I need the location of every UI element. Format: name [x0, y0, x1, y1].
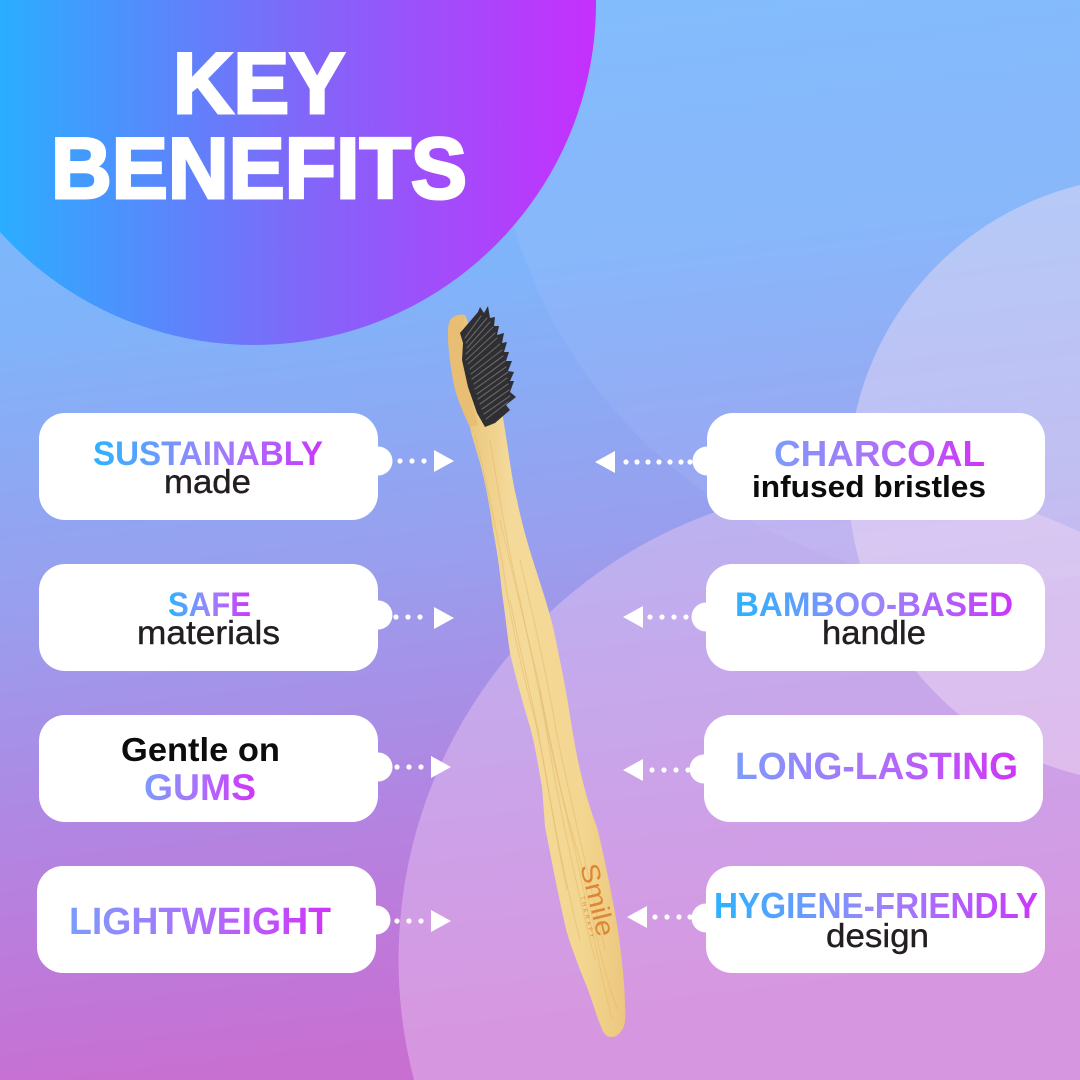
- card: long-lasting: [690, 715, 1043, 822]
- card: sustainably made: made: [164, 463, 251, 500]
- wood grain: [475, 435, 618, 1020]
- arrow: sustainably: [397, 450, 454, 472]
- logo: Smile: [574, 860, 621, 939]
- title: [51, 36, 467, 217]
- card: sustainably made: [39, 413, 392, 520]
- card: lightweight: [37, 866, 390, 973]
- card: bamboo-based handle: handle: [822, 614, 926, 651]
- card: sustainably made: SUSTAINABLY: [93, 435, 323, 473]
- logo: THERAPY: [579, 896, 595, 938]
- bristles: [460, 306, 516, 427]
- handle and head: [448, 315, 625, 1037]
- card: safe materials: materials: [137, 614, 280, 651]
- card: charcoal infused bristles: CHARCOAL: [774, 433, 985, 474]
- bristle highlights: [465, 316, 510, 419]
- card: gentle on gums: GUMS: [144, 767, 256, 808]
- arrow: gums: [394, 756, 451, 778]
- card: long-lasting: LONG-LASTING: [735, 746, 1018, 788]
- card: bamboo-based handle: [692, 564, 1045, 671]
- arrow: safe: [393, 607, 454, 629]
- card: charcoal infused bristles: [692, 413, 1045, 520]
- card: lightweight: LIGHTWEIGHT: [69, 901, 331, 943]
- title: KEY: [173, 36, 345, 132]
- head shading: [448, 315, 478, 427]
- arrow: lightweight: [394, 910, 451, 932]
- card: hygiene-friendly design: HYGIENE-FRIENDLY: [714, 885, 1038, 926]
- card: charcoal infused bristles: infused bristles: [752, 469, 986, 504]
- arrow: long-lasting: [623, 759, 691, 781]
- title: BENEFITS: [51, 121, 467, 217]
- card: gentle on gums: Gentle on: [121, 731, 280, 768]
- card: bamboo-based handle: BAMBOO-BASED: [735, 586, 1013, 624]
- arrow: hygiene: [627, 906, 693, 928]
- header circle: [0, 0, 596, 345]
- toothbrush: [448, 306, 625, 1037]
- card: hygiene-friendly design: [692, 866, 1045, 973]
- card: safe materials: SAFE: [168, 586, 251, 624]
- arrow: bamboo: [623, 606, 689, 628]
- card: hygiene-friendly design: design: [826, 917, 929, 954]
- arrow: charcoal: [595, 451, 693, 473]
- card: gentle on gums: [39, 715, 392, 822]
- card: safe materials: [39, 564, 392, 671]
